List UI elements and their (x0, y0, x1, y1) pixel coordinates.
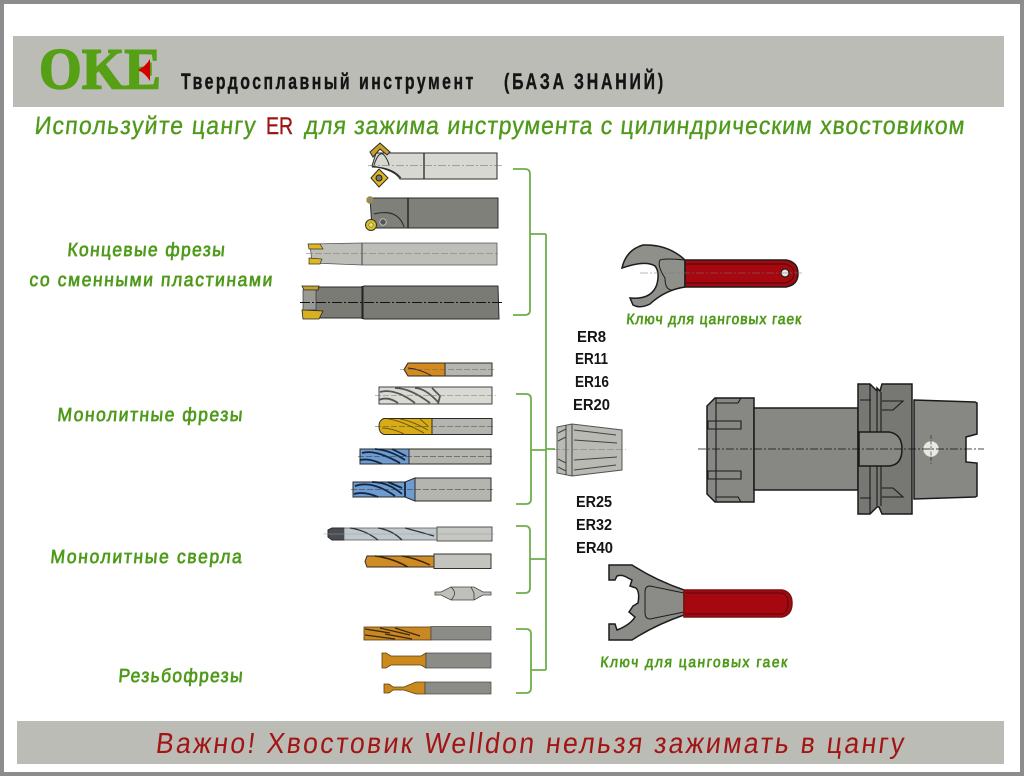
main heading: ER (266, 113, 293, 140)
label: thread mills: Резьбофрезы (118, 664, 244, 686)
holder nut (707, 398, 754, 502)
label: indexable end mills: Концевые фрезы (67, 238, 226, 260)
tool: solid mill gold tip (400, 363, 494, 376)
holder taper (914, 400, 977, 499)
collet sizes lower: ER40 (576, 540, 613, 557)
tool: solid mill blue (358, 449, 493, 464)
label: indexable end mills (29, 238, 273, 290)
tool: gold drill (365, 554, 491, 568)
tool group: solid drills (323, 527, 494, 600)
label: solid drills: Монолитные сверла (50, 545, 244, 567)
main heading: для зажима инструмента с цилиндрическим хвостовиком (303, 112, 966, 140)
logo: OKE (39, 36, 161, 102)
tool: indexable mill 2 (366, 197, 498, 230)
tool: long drill (323, 527, 494, 541)
tool group: thread mills (364, 626, 491, 694)
tool: solid mill gold ball (375, 418, 494, 434)
tool group: solid mills (351, 363, 496, 501)
tool: indexable mill 1 (368, 143, 502, 187)
collet sizes lower: ER25 (576, 494, 612, 511)
trunk line (546, 234, 555, 670)
collet sizes lower: ER32 (576, 517, 612, 534)
holder bore (923, 441, 939, 457)
holder body (754, 408, 858, 490)
header band (13, 36, 1004, 107)
wrench top (622, 245, 802, 307)
tool: thread mill 1 (364, 626, 491, 640)
collet sizes upper: ER11 (575, 351, 608, 368)
header title: Твердосплавный инструмент (181, 71, 473, 95)
footer warning: Важно! Хвостовик Welldon нельзя зажимать в цангу (154, 727, 906, 759)
bracket: thread mills (516, 629, 546, 693)
collet sizes upper: ER20 (573, 397, 610, 414)
holder flange (858, 384, 912, 514)
bracket: solid drills (516, 526, 546, 593)
tool: thread mill 2 (382, 653, 491, 668)
collet sizes upper: ER8 (577, 329, 606, 346)
label: solid mills: Монолитные фрезы (57, 403, 243, 425)
bracket: indexable end mills (513, 169, 546, 315)
collet sizes upper (573, 329, 610, 414)
main heading: Используйте цангу (33, 112, 257, 140)
collet (553, 424, 626, 476)
collet sizes upper: ER16 (575, 374, 609, 391)
tool holder (698, 384, 984, 514)
collet sizes lower (576, 494, 613, 557)
holder drive slot (859, 432, 902, 466)
footer band (17, 721, 1004, 764)
tool: indexable mill 3 (306, 243, 498, 265)
tool: center drill (435, 587, 491, 600)
wrench bottom caption: Ключ для цанговых гаек (600, 655, 788, 671)
wrench top caption: Ключ для цанговых гаек (626, 312, 803, 328)
tool: thread mill 3 (384, 682, 491, 694)
bracket: solid mills (516, 394, 546, 504)
tool group: indexable end mills (300, 143, 502, 319)
wrench bottom (609, 565, 792, 640)
tool: solid mill light (375, 387, 496, 404)
label: indexable end mills: со сменными пластинами (29, 268, 273, 290)
tool: indexable mill 4 (300, 286, 502, 319)
header subtitle: (БАЗА ЗНАНИЙ) (504, 69, 663, 95)
tool: solid mill blue large (351, 478, 493, 501)
